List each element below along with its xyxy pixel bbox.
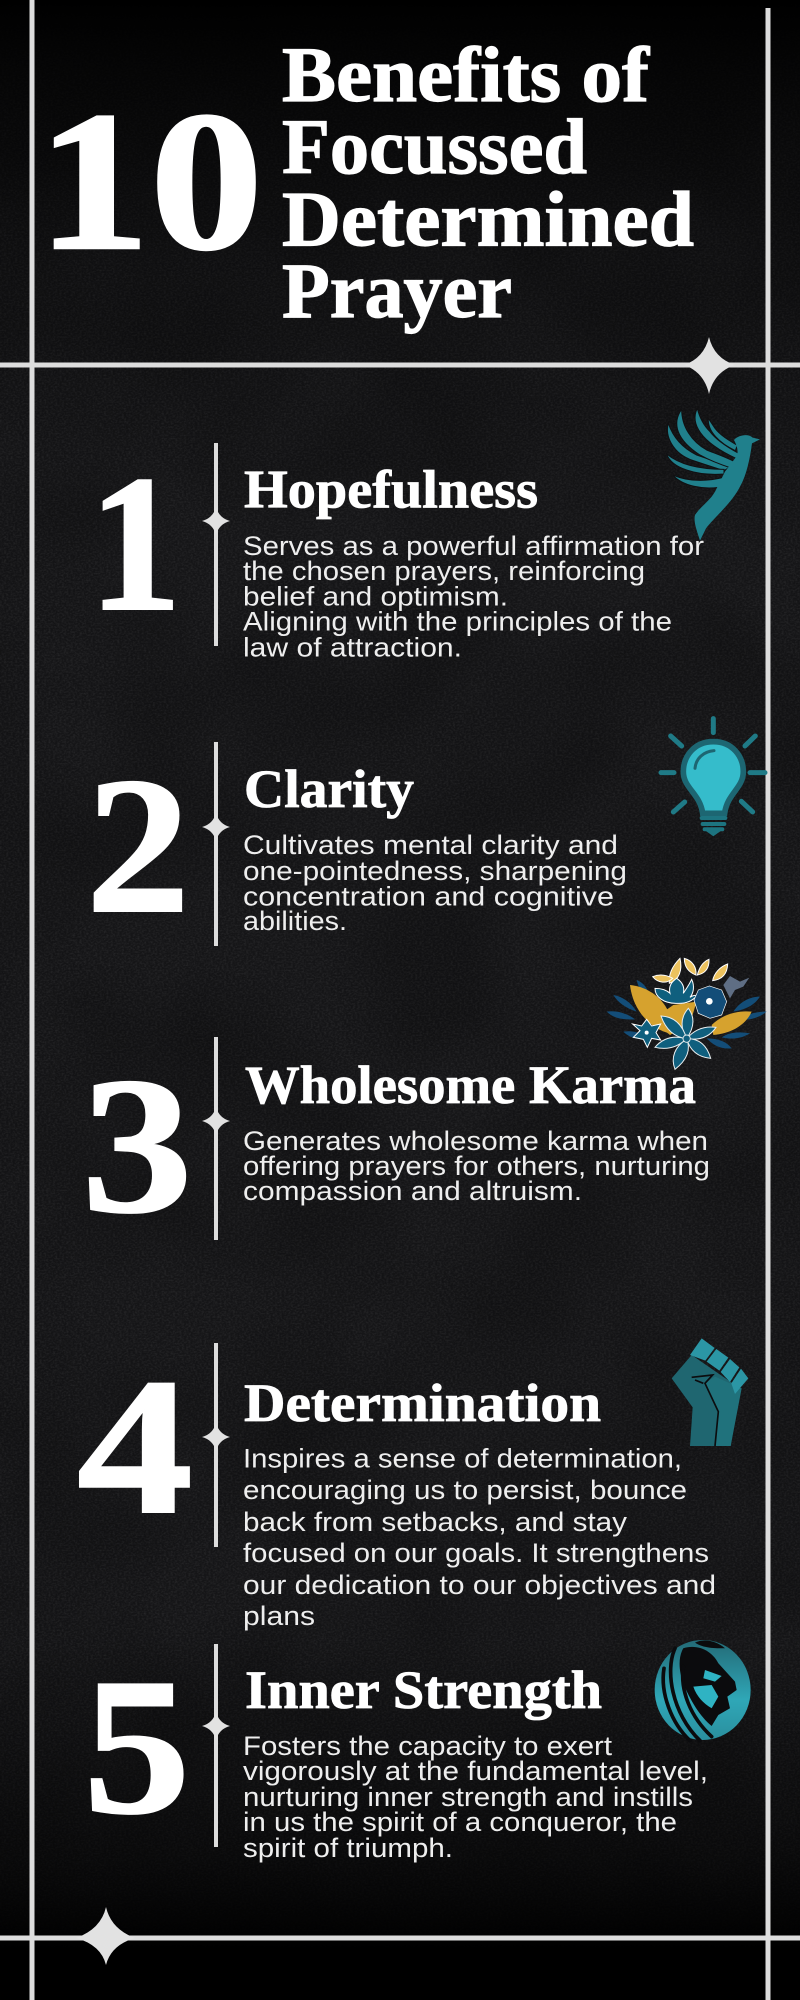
number 2: 2: [86, 738, 190, 954]
panel: benefit 1 Hopefulness: [89, 408, 760, 662]
body text: Serves as a powerful affirmation for: [243, 531, 704, 561]
divider with star: [202, 1343, 230, 1547]
body text: plans: [243, 1601, 315, 1631]
panel: benefit 3 Wholesome Karma: [82, 958, 767, 1254]
body text: one-pointedness, sharpening: [243, 856, 627, 886]
body text: [243, 1731, 708, 1863]
title heading: Focussed: [282, 103, 587, 190]
title heading: [282, 31, 694, 334]
body text: in us the spirit of a conqueror, the: [243, 1807, 677, 1837]
icon: dove: [667, 408, 760, 541]
icon: flower bouquet: [607, 958, 767, 1069]
body text: [243, 1444, 716, 1631]
body text: [243, 1126, 710, 1206]
title heading: Benefits of: [282, 31, 650, 118]
heading: Hopefulness: [244, 460, 538, 520]
small white flower: [633, 1019, 661, 1047]
body text: back from setbacks, and stay: [243, 1507, 628, 1537]
body text: offering prayers for others, nurturing: [243, 1151, 710, 1181]
body text: [243, 531, 704, 662]
body text: Fosters the capacity to exert: [243, 1731, 613, 1761]
divider with star: [202, 1037, 230, 1240]
body text: Inspires a sense of determination,: [243, 1444, 682, 1474]
body text: spirit of triumph.: [243, 1833, 453, 1863]
number 3: 3: [82, 1038, 193, 1254]
title heading: Prayer: [282, 247, 512, 334]
body text: encouraging us to persist, bounce: [243, 1475, 687, 1505]
body text: Generates wholesome karma when: [243, 1126, 708, 1156]
icon: light bulb: [661, 719, 765, 836]
heading: Clarity: [244, 759, 414, 819]
body text: Cultivates mental clarity and: [243, 830, 618, 860]
panel: benefit 5 Inner Strength: [83, 1639, 751, 1863]
body text: nurturing inner strength and instills: [243, 1782, 693, 1812]
top teal flower: [655, 978, 697, 1003]
body text: abilities.: [243, 906, 347, 936]
panel: benefit 2 Clarity: [86, 719, 765, 954]
body text: our dedication to our objectives and: [243, 1570, 716, 1600]
body text: Aligning with the principles of the: [243, 606, 672, 636]
body text: law of attraction.: [243, 632, 462, 662]
body text: focused on our goals. It strengthens: [243, 1538, 709, 1568]
body text: concentration and cognitive: [243, 882, 614, 912]
heading: Inner Strength: [245, 1660, 602, 1720]
divider with star: [202, 1644, 230, 1847]
title number 10: 10: [37, 72, 263, 292]
icon: top star: [684, 337, 735, 394]
title heading: Determined: [282, 176, 694, 262]
body text: [243, 830, 627, 936]
body text: vigorously at the fundamental level,: [243, 1756, 708, 1786]
heading: Determination: [244, 1373, 601, 1433]
number 1: 1: [89, 436, 182, 652]
body text: compassion and altruism.: [243, 1176, 582, 1206]
body text: the chosen prayers, reinforcing: [243, 556, 645, 586]
icon: raised fist: [672, 1338, 748, 1446]
icon: bottom star: [76, 1907, 135, 1965]
divider with star: [202, 443, 230, 646]
icon: lion head: [655, 1640, 751, 1741]
number 4: 4: [77, 1339, 193, 1555]
body text: belief and optimism.: [243, 582, 508, 612]
divider with star: [202, 742, 230, 946]
number 5: 5: [83, 1639, 190, 1855]
large teal flower: [655, 1008, 716, 1069]
heading: Wholesome Karma: [245, 1055, 696, 1115]
panel: benefit 4 Determination: [77, 1338, 748, 1631]
round blue flower: [694, 986, 727, 1018]
